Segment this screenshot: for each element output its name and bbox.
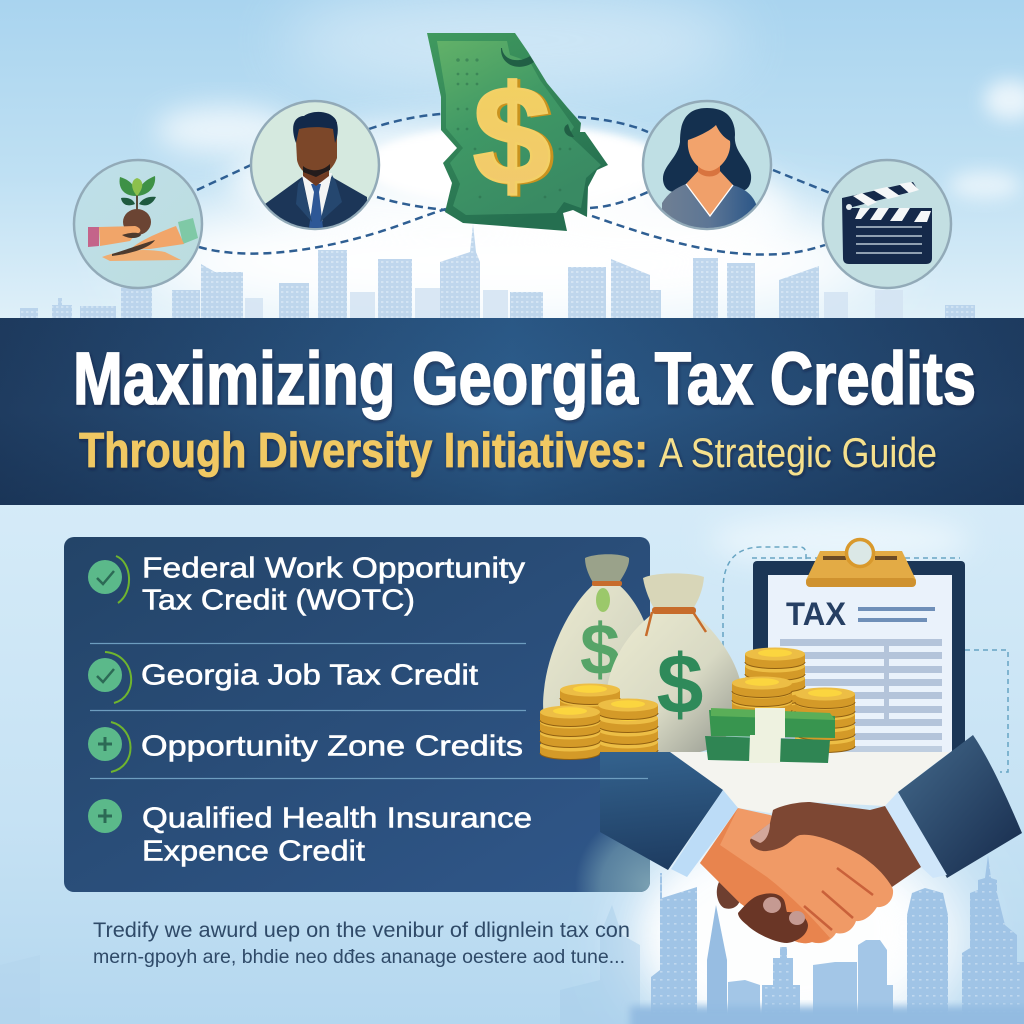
item: Georgia Job Tax Credit: Georgia Job Tax Credit xyxy=(141,660,478,692)
dark lower-left finger xyxy=(717,880,740,909)
dollar sign: $ xyxy=(476,57,554,215)
item: Qualified Health Insurance Expence Credit: Expence Credit xyxy=(142,836,365,868)
item: Federal Work Opportunity Tax Credit: Tax Credit (WOTC) xyxy=(142,584,415,616)
money bag: back xyxy=(543,554,655,738)
light hand xyxy=(700,808,893,943)
footnote text xyxy=(93,919,630,968)
item: Qualified Health Insurance Expence Credit xyxy=(88,799,532,868)
lower city skyline xyxy=(0,855,1024,1024)
Georgia state map with dollar sign xyxy=(427,33,608,231)
white table surface under money xyxy=(668,752,950,813)
circle icon: businesswoman xyxy=(643,101,771,232)
upper city skyline xyxy=(20,224,975,318)
item: Opportunity Zone Credits xyxy=(88,722,523,772)
dark fingers xyxy=(738,893,808,943)
item: Opportunity Zone Credits: Opportunity Zone Credits xyxy=(141,730,523,762)
dollar sign: $ xyxy=(473,56,551,214)
circle icon: businessman xyxy=(251,101,379,232)
item: Federal Work Opportunity Tax Credit xyxy=(88,552,526,616)
footnote text: Tredify we awurd uep on the venibur of dlignlein tax con xyxy=(93,919,630,942)
right sleeve xyxy=(898,735,1022,878)
handshake xyxy=(600,735,1022,943)
item: Qualified Health Insurance Expence Credit: Qualified Health Insurance xyxy=(142,802,532,834)
cash bundles xyxy=(705,708,835,763)
left sleeve xyxy=(600,752,723,870)
benefits panel xyxy=(64,537,650,892)
money bag: front: $ xyxy=(657,637,703,731)
gold coin stacks xyxy=(540,648,855,760)
item: Federal Work Opportunity Tax Credit: Federal Work Opportunity xyxy=(142,552,526,584)
table rows xyxy=(780,639,942,756)
item: Georgia Job Tax Credit xyxy=(88,652,478,703)
money bag: front xyxy=(606,573,742,752)
subtitle: A Strategic Guide xyxy=(659,429,937,476)
subtitle: Through Diversity Initiatives: xyxy=(79,424,648,478)
tax label: TAX xyxy=(786,596,847,632)
tax clipboard xyxy=(753,540,965,760)
circle icon: hands holding plant xyxy=(74,160,202,288)
dashed network lines xyxy=(197,114,830,255)
circle icon: film clapperboard xyxy=(823,160,951,288)
footnote text: mern-gpoyh are, bhdie neo dđes ananage oestere aod tune... xyxy=(93,947,625,968)
clip xyxy=(806,540,916,587)
title banner xyxy=(0,318,1024,505)
dark hand and thumb xyxy=(750,802,921,887)
dashed connector lines behind clipboard xyxy=(723,547,1008,772)
money bag: back: $ xyxy=(580,610,620,690)
